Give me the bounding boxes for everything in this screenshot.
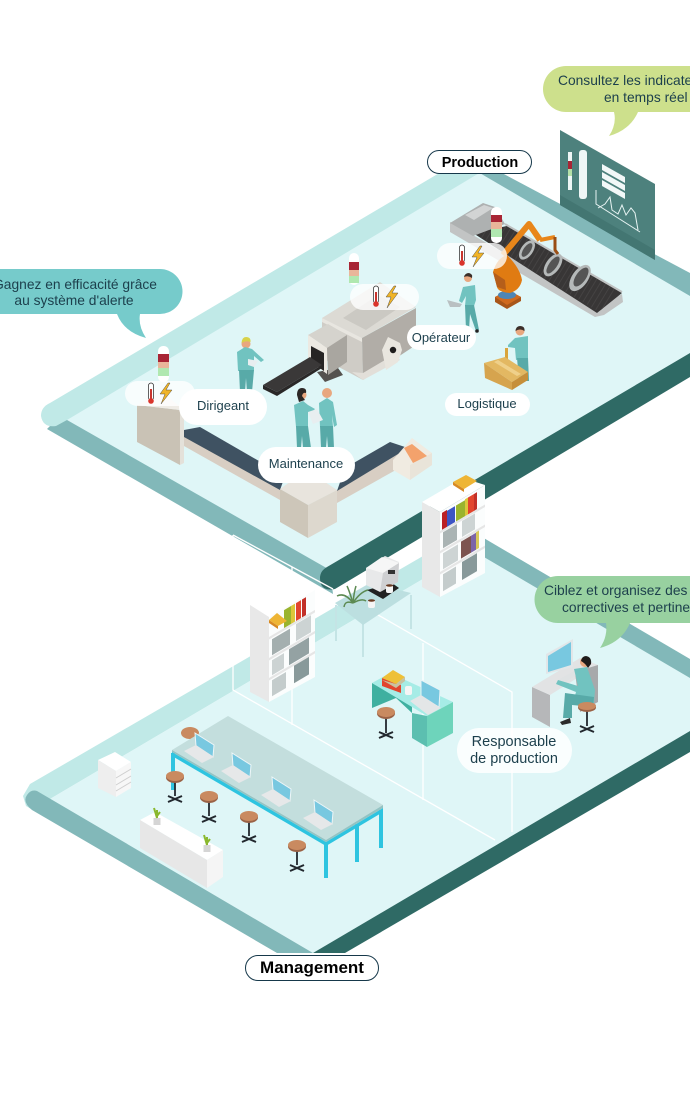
person: dirigeant [237,337,264,392]
white counter with plants [140,808,223,888]
stool: desk [377,707,395,738]
robot arm [493,224,558,309]
section label: management: Management [260,958,364,977]
label: logistique: Logistique [457,396,517,411]
dashboard screen [560,130,655,260]
label: opérateur: Opérateur [412,330,471,345]
small white cabinet [98,752,131,797]
coffee table [335,556,411,657]
callout: alert system: au système d'alerte [14,293,134,308]
callout: indicators [543,66,690,136]
platform: production [41,172,690,594]
callout: alert system [0,269,182,338]
label: dirigeant: Dirigeant [197,398,249,413]
room outline walls [233,535,512,840]
signal tower 3 [491,207,502,243]
label: responsable de production: Responsable [472,734,556,750]
cup [368,599,375,608]
stool: workstation [578,702,596,732]
stool 4 [288,840,306,871]
left bookshelf [250,590,315,702]
long meeting table [172,716,383,878]
desk with books and laptop [372,670,453,747]
laptop 2 [221,753,251,783]
conveyor L-shaped [137,392,432,538]
label: maintenance: Maintenance [269,456,343,471]
machine [263,282,416,396]
laptop 3 [261,777,291,807]
orange tray [393,438,432,480]
platform: management [23,527,690,953]
signal tower 1 [158,346,169,382]
sensor badge 3 [437,243,507,269]
stool 3 [240,811,258,842]
label: responsable de production: de production [470,751,558,767]
label: dirigeant [179,389,267,425]
label: maintenance [258,447,355,483]
right bookshelf [422,475,485,597]
stool: back of table [181,727,199,739]
label: opérateur [407,325,476,350]
person: opérateur [447,273,479,333]
sensor badge 1 [125,381,195,406]
label: logistique [445,393,530,416]
persons: maintenance pair [294,388,337,448]
signal tower 2 [349,253,359,285]
laptop 1 [184,733,214,763]
plant [337,586,368,607]
person: logistique with box [484,326,529,390]
callout: corrective actions [534,576,690,648]
coffee machine [366,556,399,599]
section label: production: Production [442,155,518,171]
sensor badge 2 [350,284,419,310]
wall edge over production band [233,535,333,589]
left machine box [137,392,184,465]
shoes on belt [516,238,595,295]
laptop 4 [303,800,333,830]
front machine box [280,470,337,538]
section label: management [246,956,378,980]
stool 1 [166,771,184,802]
conveyor with robot [450,203,623,317]
callout: indicators: en temps réel [604,90,688,105]
stool 2 [200,791,218,822]
section label: production [428,150,532,174]
label: responsable de production [457,728,572,773]
workstation with responsable [532,639,598,727]
